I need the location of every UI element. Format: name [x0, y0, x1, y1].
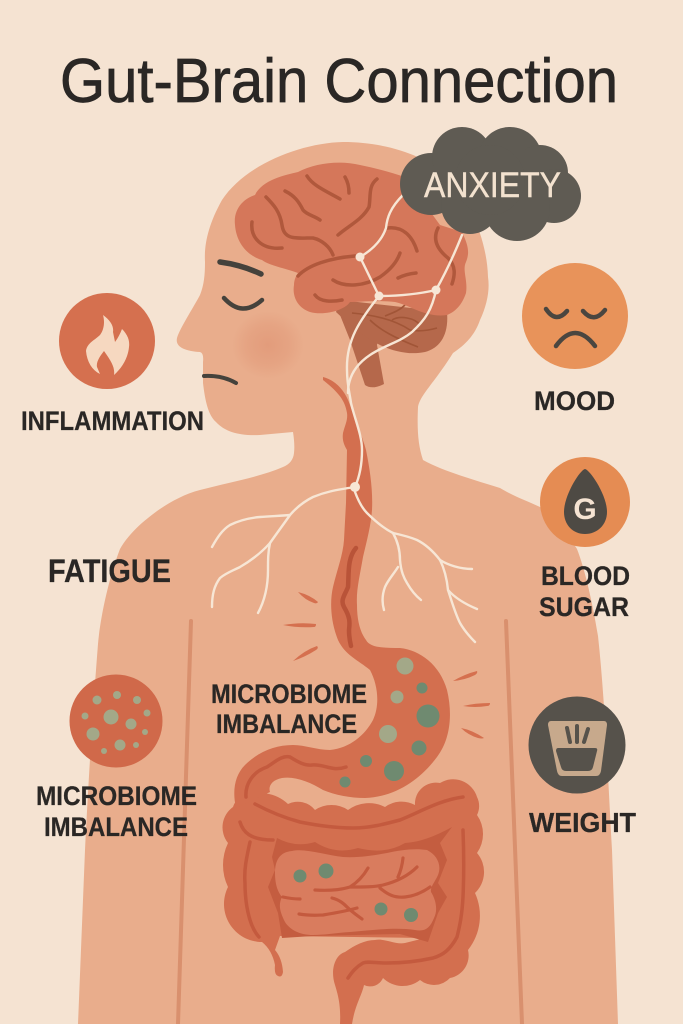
- brain stem and cerebellum: [336, 300, 447, 387]
- label: microbiome imbalance left: [36, 781, 197, 842]
- label: weight: WEIGHT: [529, 807, 636, 838]
- label: microbiome imbalance centre: IMBALANCE: [216, 709, 357, 739]
- label: inflammation: INFLAMMATION: [21, 406, 204, 436]
- label: blood sugar: SUGAR: [539, 592, 629, 622]
- gut bacteria dots: stomach: [340, 658, 440, 788]
- icon: microbiome circle: [70, 674, 162, 768]
- label: microbiome imbalance left: MICROBIOME: [36, 781, 197, 811]
- large intestine: [223, 779, 484, 1024]
- anxiety cloud: [400, 127, 581, 241]
- icon: mood sad face: [522, 263, 628, 369]
- icon: inflammation flame: [59, 293, 155, 389]
- anxiety cloud: ANXIETY: [424, 166, 561, 205]
- small intestine: [268, 827, 452, 942]
- icon: blood sugar drop: [540, 457, 630, 547]
- label: microbiome imbalance left: IMBALANCE: [44, 812, 188, 842]
- brain: [235, 163, 468, 315]
- vagus nerve network: [212, 195, 477, 642]
- label: mood: MOOD: [534, 386, 615, 416]
- title: Gut-Brain Connection: [60, 47, 618, 116]
- face features: [204, 262, 304, 383]
- label: blood sugar: [539, 561, 630, 622]
- body silhouette: [78, 142, 618, 1024]
- icon: weight scale: [528, 696, 626, 794]
- label: microbiome imbalance centre: MICROBIOME: [211, 679, 367, 709]
- label: microbiome imbalance centre: [211, 679, 367, 739]
- icon: blood sugar drop: G: [573, 493, 597, 526]
- label: blood sugar: BLOOD: [541, 561, 630, 591]
- oesophagus and stomach: [234, 377, 450, 808]
- label: fatigue: FATIGUE: [48, 553, 171, 589]
- irritation ticks around stomach: [283, 592, 490, 738]
